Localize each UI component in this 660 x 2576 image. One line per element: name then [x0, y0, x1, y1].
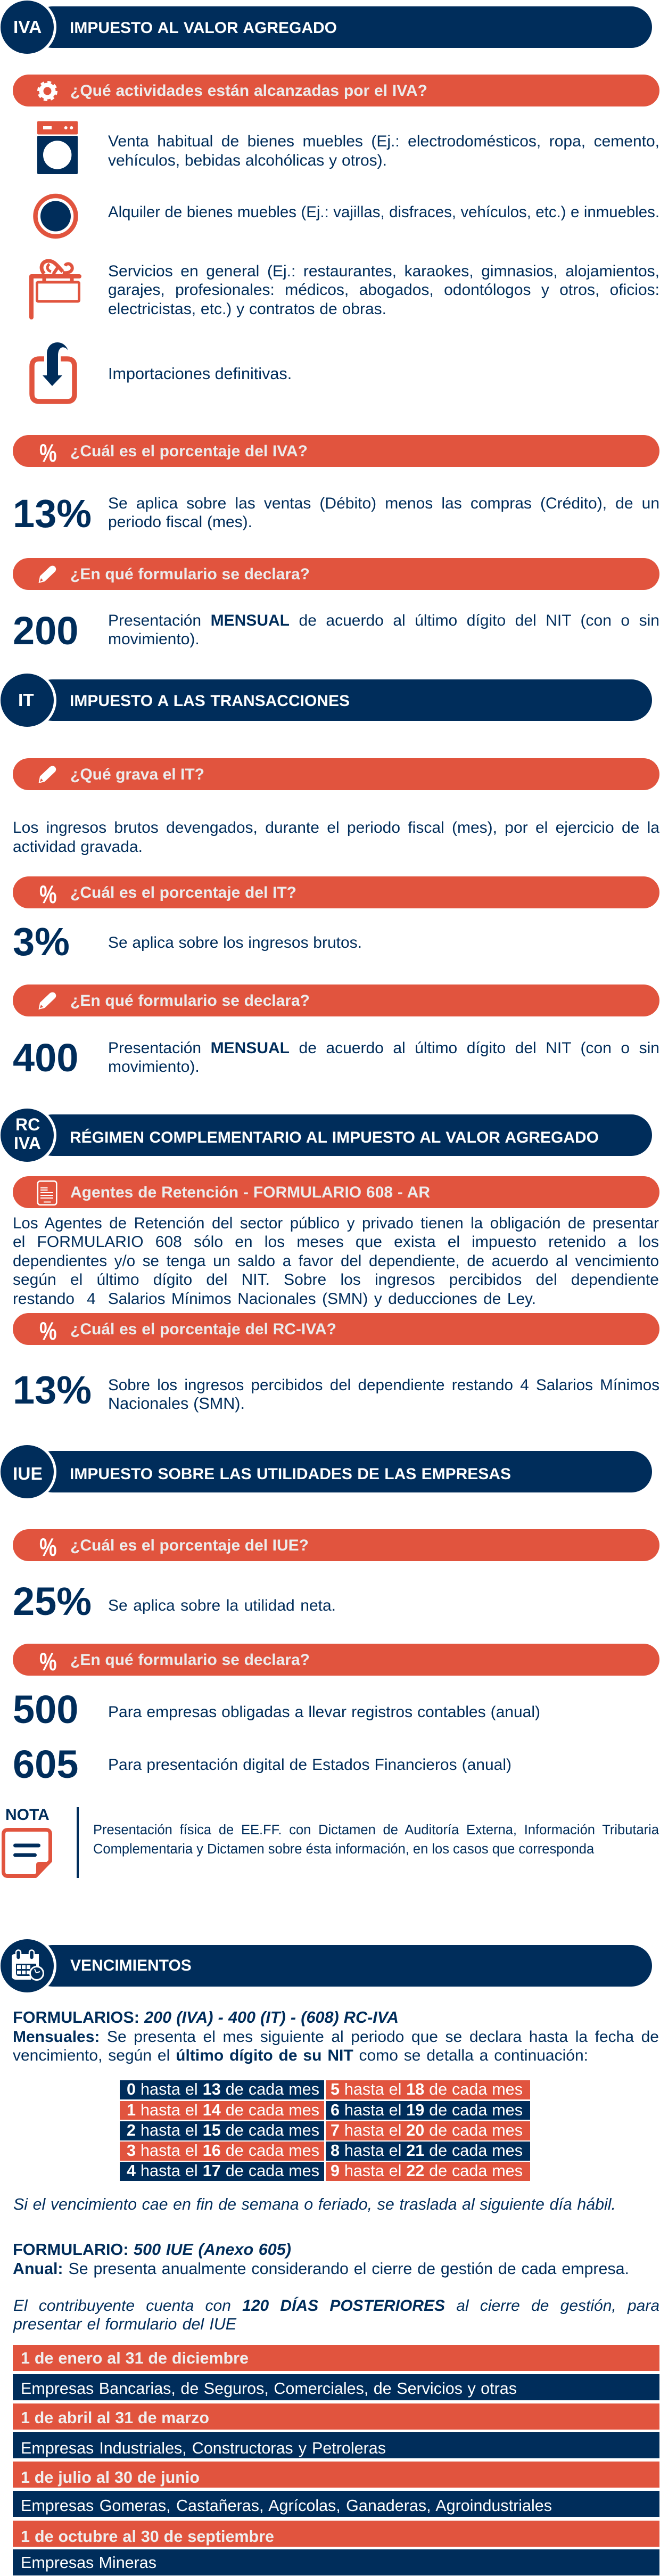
- row: enero-diciembre: [13, 2345, 659, 2371]
- row: octubre-septiembre: [13, 2521, 659, 2547]
- heading: actividades alcanzadas: [13, 75, 659, 106]
- header: IVA: IVA: [13, 18, 42, 37]
- text: sobre ingresos percibidos: Sobre los ingresos percibidos del dependiente restando 4 Salarios Mínimos: [108, 1376, 659, 1394]
- note: fin de semana: Si el vencimiento cae en fin de semana o feriado, se traslada al siguiente día hábil.: [13, 2195, 616, 2213]
- table: vencimiento por dígito NIT: 2 hasta el 15 de cada mes: [127, 2121, 319, 2139]
- row: octubre-septiembre: 1 de octubre al 30 de septiembre: [21, 2528, 274, 2546]
- heading: porcentaje IT: ¿Cuál es el porcentaje del IT?: [70, 884, 296, 901]
- text: agentes de retención párrafo: según el último dígito del NIT. Sobre los ingresos percibidos del dependiente: [13, 1271, 659, 1289]
- icon: sticky note: [0, 1826, 54, 1880]
- text: formularios mensuales: FORMULARIOS: 200 (IVA) - 400 (IT) - (608) RC-IVA: [13, 2008, 399, 2027]
- header: RC-IVA: [0, 1108, 655, 1162]
- header: IUE: IMPUESTO SOBRE LAS UTILIDADES DE LAS EMPRESAS: [70, 1465, 511, 1483]
- text: registros contables: Para empresas obligadas a llevar registros contables (anual): [108, 1703, 540, 1721]
- row: julio-junio: 1 de julio al 30 de junio: [21, 2468, 200, 2487]
- text: sobre ingresos percibidos: Nacionales (SMN).: [108, 1394, 245, 1413]
- table: vencimiento por dígito NIT: 4 hasta el 17 de cada mes: [127, 2162, 319, 2180]
- figure: 500: 500: [13, 1687, 78, 1732]
- heading: porcentaje RC-IVA: %: [39, 1317, 57, 1345]
- table: vencimiento por dígito NIT: 1 hasta el 14 de cada mes: [127, 2101, 319, 2119]
- header: IVA: IMPUESTO AL VALOR AGREGADO: [70, 19, 337, 37]
- heading: porcentaje IVA: ¿Cuál es el porcentaje del IVA?: [70, 442, 308, 460]
- row: industriales: Empresas Industriales, Constructoras y Petroleras: [21, 2439, 386, 2457]
- figure: 200: 200: [13, 609, 78, 653]
- heading: porcentaje IT: [13, 876, 659, 908]
- table: vencimiento por dígito NIT: 3 hasta el 16 de cada mes: [127, 2142, 319, 2160]
- text: estados financieros: Para presentación digital de Estados Financieros (anual): [108, 1756, 512, 1774]
- header: IUE: IUE: [13, 1464, 43, 1484]
- section: RC-IVA: [0, 1105, 660, 1419]
- callout: nota: Presentación física de EE.FF. con Dictamen de Auditoría Externa, Información Tributaria: [93, 1823, 659, 1837]
- section: IUE: [0, 1443, 660, 1885]
- header: IVA: [1, 1, 652, 54]
- table: vencimiento por dígito NIT: [120, 2080, 530, 2181]
- text: 120 días: [13, 2296, 659, 2334]
- text: formularios mensuales: [13, 2008, 659, 2065]
- heading: formulario IT: [13, 985, 659, 1016]
- heading: formulario IT: ¿En qué formulario se declara?: [70, 992, 310, 1010]
- row: bancarias: Empresas Bancarias, de Seguros, Comerciales, de Servicios y otras: [21, 2380, 517, 2398]
- heading: formulario IVA: [13, 558, 659, 590]
- header: vencimientos: VENCIMIENTOS: [70, 1957, 192, 1974]
- text: servicios: [108, 262, 659, 318]
- section: vencimientos: [0, 1938, 660, 2576]
- text: servicios: electricistas, etc.) y contratos de obras.: [108, 300, 386, 318]
- text: presentación mensual 400: movimiento).: [108, 1058, 200, 1076]
- figure: 25%: 25%: [13, 1579, 92, 1623]
- text: servicios: Servicios en general (Ej.: restaurantes, karaokes, gimnasios, alojamientos,: [108, 262, 659, 280]
- heading: porcentaje RC-IVA: ¿Cuál es el porcentaje del RC-IVA?: [70, 1320, 336, 1338]
- header: IT: IT: [18, 691, 34, 710]
- row: abril-marzo: [13, 2403, 659, 2430]
- heading: qué grava: ¿Qué grava el IT?: [70, 766, 204, 783]
- text: formulario 500: Anual: Se presenta anualmente considerando el cierre de gestión de cada empresa.: [13, 2260, 629, 2278]
- callout: nota: Complementaria y Dictamen sobre ésta información, en los casos que corresponda: [93, 1842, 594, 1857]
- icon: import arrow: [29, 342, 77, 404]
- section: IT: [1, 674, 659, 1080]
- icon: calendar: [0, 1938, 54, 1992]
- row: bancarias: [13, 2374, 659, 2400]
- figure: 13%: 13%: [13, 491, 92, 536]
- text: presentación mensual 200: Presentación MENSUAL de acuerdo al último dígito del NIT (con o sin: [108, 612, 659, 629]
- row: enero-diciembre: 1 de enero al 31 de diciembre: [21, 2349, 249, 2367]
- text: utilidad neta: Se aplica sobre la utilidad neta.: [108, 1596, 336, 1614]
- figure: 605: 605: [13, 1742, 78, 1786]
- icon: washing machine: [37, 121, 78, 174]
- text: ingresos brutos: Los ingresos brutos devengados, durante el periodo fiscal (mes), por el ejercicio de la: [13, 819, 659, 836]
- text: venta habitual: Venta habitual de bienes muebles (Ej.: electrodomésticos, ropa, cemento,: [108, 133, 659, 150]
- heading: agentes de retención: Agentes de Retención - FORMULARIO 608 - AR: [70, 1184, 430, 1201]
- text: formularios mensuales: vencimiento, según el último dígito de su NIT como se detalla a continuación:: [13, 2047, 588, 2064]
- table: vencimiento por dígito NIT: 8 hasta el 21 de cada mes: [331, 2142, 523, 2160]
- heading: porcentaje IUE: %: [39, 1533, 57, 1561]
- header: vencimientos: [0, 1939, 655, 1992]
- heading: formulario IUE: [13, 1644, 659, 1676]
- table: vencimiento por dígito NIT: 6 hasta el 19 de cada mes: [331, 2101, 523, 2119]
- text: venta habitual: [108, 133, 659, 169]
- figure: 13% RC-IVA: 13%: [13, 1368, 92, 1412]
- table: vencimiento por dígito NIT: 0 hasta el 13 de cada mes: [127, 2080, 319, 2098]
- text: agentes de retención párrafo: el FORMULARIO 608 sólo en los meses que exista el impuesto retenido a los: [13, 1233, 659, 1251]
- row: julio-junio: [13, 2462, 659, 2488]
- text: presentación mensual 200: movimiento).: [108, 630, 200, 648]
- text: agentes de retención párrafo: [13, 1214, 659, 1308]
- text: se aplica sobre ventas: Se aplica sobre las ventas (Débito) menos las compras (Crédito), de un: [108, 495, 659, 512]
- row: gomeras: Empresas Gomeras, Castañeras, Agrícolas, Ganaderas, Agroindustriales: [21, 2497, 552, 2515]
- heading: porcentaje RC-IVA: [13, 1313, 659, 1345]
- text: ingresos brutos: [13, 818, 659, 857]
- heading: agentes de retención: [13, 1176, 659, 1208]
- text: agentes de retención párrafo: dependientes y/o se tenga un saldo a favor del dependiente, de acuerdo al vencimiento: [13, 1252, 659, 1270]
- icon: rental ring: [33, 194, 78, 239]
- text: alquiler: Alquiler de bienes muebles (Ej.: vajillas, disfraces, vehículos, etc.) e inmuebles.: [108, 203, 659, 221]
- text: 120 días: El contribuyente cuenta con 120 DÍAS POSTERIORES al cierre de gestión, para: [13, 2297, 659, 2315]
- table: vencimiento por dígito NIT: 7 hasta el 20 de cada mes: [331, 2121, 523, 2139]
- header: IUE: [0, 1445, 655, 1498]
- callout: nota: NOTA: [5, 1806, 50, 1824]
- text: 120 días: presentar el formulario del IUE: [13, 2315, 236, 2333]
- heading: porcentaje IVA: [13, 435, 659, 467]
- heading: qué grava: [13, 758, 659, 790]
- section: IVA: [1, 1, 659, 653]
- row: mineras: [13, 2549, 659, 2575]
- heading: actividades alcanzadas: ¿Qué actividades están alcanzadas por el IVA?: [70, 82, 427, 100]
- table: vencimiento por dígito NIT: 9 hasta el 22 de cada mes: [331, 2162, 523, 2180]
- heading: porcentaje IVA: %: [39, 439, 57, 467]
- heading: formulario IUE: ¿En qué formulario se declara?: [70, 1651, 310, 1669]
- text: sobre ingresos percibidos: [108, 1376, 659, 1414]
- heading: porcentaje IUE: ¿Cuál es el porcentaje del IUE?: [70, 1537, 309, 1554]
- text: se aplica sobre ventas: periodo fiscal (mes).: [108, 513, 252, 531]
- text: formularios mensuales: Mensuales: Se presenta el mes siguiente al periodo que se declara hasta la fecha de: [13, 2028, 659, 2046]
- text: presentación mensual 400: [108, 1039, 659, 1077]
- table: vencimiento por dígito NIT: 5 hasta el 18 de cada mes: [331, 2080, 523, 2098]
- text: venta habitual: vehículos, bebidas alcohólicas y otros).: [108, 152, 387, 169]
- text: se aplica sobre ingresos: Se aplica sobre los ingresos brutos.: [108, 934, 362, 951]
- header: IT: IMPUESTO A LAS TRANSACCIONES: [70, 692, 350, 710]
- figure: 3%: 3%: [13, 920, 70, 964]
- row: mineras: Empresas Mineras: [21, 2554, 156, 2572]
- header: RC-IVA: RC: [15, 1115, 40, 1134]
- text: importaciones: Importaciones definitivas.: [108, 365, 292, 383]
- heading: formulario IUE: %: [39, 1647, 57, 1676]
- text: formulario 500: [13, 2241, 629, 2278]
- header: RC-IVA: RÉGIMEN COMPLEMENTARIO AL IMPUESTO AL VALOR AGREGADO: [70, 1129, 599, 1146]
- text: agentes de retención párrafo: restando 4 Salarios Mínimos Nacionales (SMN) y deducciones de Ley.: [13, 1290, 536, 1308]
- heading: formulario IVA: ¿En qué formulario se declara?: [70, 565, 310, 583]
- text: formulario 500: FORMULARIO: 500 IUE (Anexo 605): [13, 2241, 291, 2259]
- text: servicios: garajes, profesionales: médicos, abogados, odontólogos y otros, oficios:: [108, 281, 659, 299]
- heading: porcentaje IT: %: [39, 880, 57, 908]
- text: presentación mensual 200: [108, 612, 659, 648]
- text: ingresos brutos: actividad gravada.: [13, 838, 143, 856]
- icon: shop sign: [29, 259, 81, 319]
- row: abril-marzo: 1 de abril al 31 de marzo: [21, 2409, 209, 2427]
- header: IT: [0, 673, 655, 727]
- figure: 400: 400: [13, 1036, 78, 1080]
- row: gomeras: [13, 2491, 659, 2517]
- text: se aplica sobre ventas: [108, 495, 659, 531]
- callout: nota: [0, 1805, 660, 1880]
- row: industriales: [13, 2432, 659, 2458]
- text: presentación mensual 400: Presentación MENSUAL de acuerdo al último dígito del NIT (con o sin: [108, 1039, 659, 1057]
- text: agentes de retención párrafo: Los Agentes de Retención del sector público y privado tienen la obligación de presentar: [13, 1215, 659, 1232]
- header: RC-IVA: IVA: [14, 1134, 41, 1153]
- heading: porcentaje IUE: [13, 1529, 659, 1561]
